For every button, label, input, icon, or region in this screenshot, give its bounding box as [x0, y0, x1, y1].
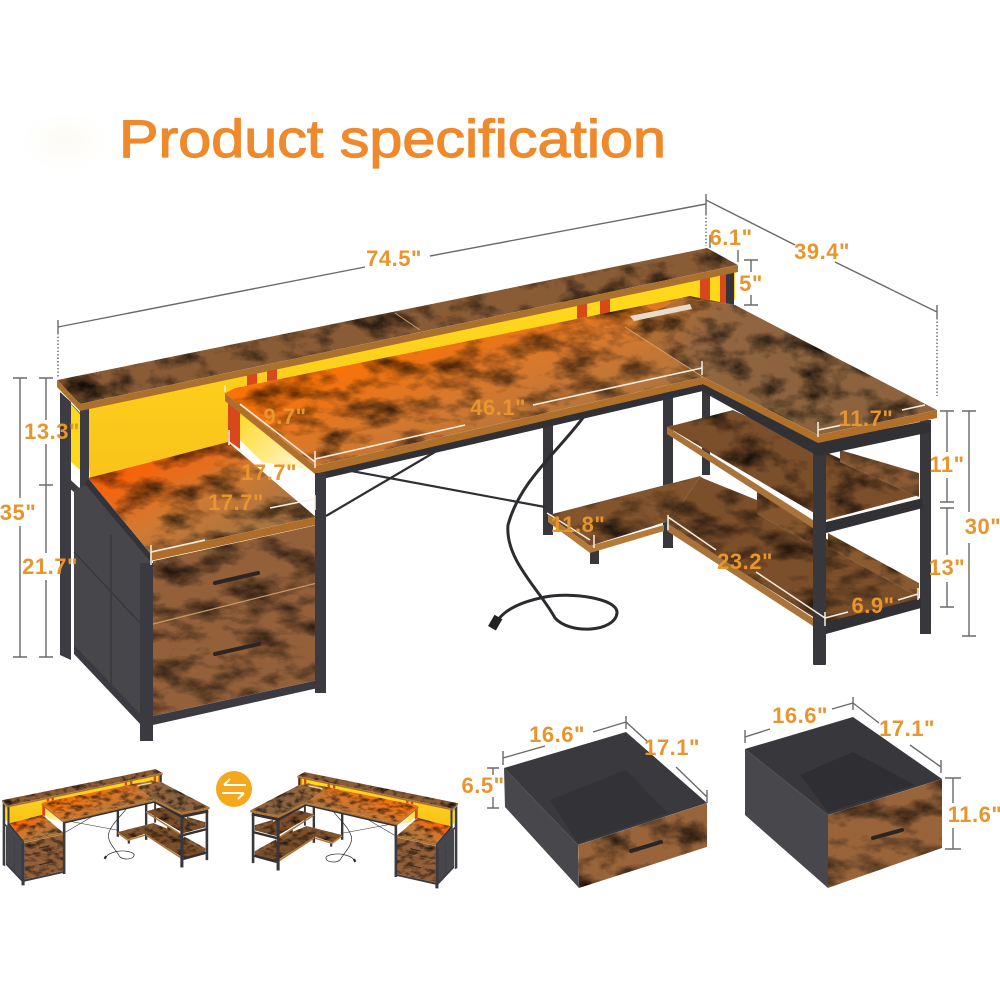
drawer interior [504, 732, 707, 845]
cabinet frame [74, 473, 326, 741]
deep drawer handle [873, 830, 902, 838]
dotted extension lines [58, 214, 937, 396]
cabinet front drawers [153, 525, 318, 716]
dimension labels [0, 225, 1000, 827]
dimension labels: 13" [929, 555, 965, 580]
right hutch post [726, 270, 734, 306]
desk and shelf-unit legs [543, 385, 931, 634]
dimension labels: 16.6" [772, 703, 828, 728]
drawer front [578, 803, 707, 888]
icon: reversible swap arrows [216, 771, 252, 807]
cross brace [326, 449, 545, 516]
hutch risers [228, 272, 726, 450]
deep drawer front [828, 779, 942, 888]
drawer: shallow [504, 732, 707, 888]
drawer floor [550, 770, 668, 843]
dimension labels: 5" [739, 271, 763, 296]
dimension labels: 17.7" [241, 460, 297, 485]
dimension labels: 21.7" [22, 554, 78, 579]
desk surface [225, 296, 937, 466]
cabinet top [85, 442, 316, 561]
deep drawer interior [745, 717, 942, 815]
power plug [488, 615, 502, 631]
glowing back panel [84, 270, 735, 480]
dimension labels: 11.8" [551, 512, 605, 537]
main desk illustration [57, 248, 937, 741]
dimension labels: 9.7" [263, 404, 307, 429]
deep drawer side [745, 749, 828, 888]
dimension labels: 11.7" [839, 406, 893, 431]
dimension labels: 17.7" [208, 490, 264, 515]
lower right shelf [667, 477, 921, 634]
small side shelf [548, 476, 735, 553]
deep drawer floor [800, 752, 915, 812]
dimension labels: 39.4" [794, 239, 850, 264]
upper right shelf [667, 410, 923, 533]
power cord [498, 415, 617, 629]
dimension labels: 35" [0, 500, 36, 525]
dimension labels: 11" [929, 452, 965, 477]
dimension labels: 74.5" [366, 246, 422, 271]
shelf unit front leg [813, 445, 826, 665]
dimension labels: 6.1" [709, 225, 753, 250]
dimension labels: 17.1" [644, 735, 700, 760]
desk front edge banding [225, 377, 937, 474]
hutch shelf [57, 248, 738, 411]
drawer handle [631, 842, 661, 851]
under-desk rails [318, 384, 931, 480]
dimension labels: 17.1" [879, 716, 935, 741]
white measurement lines on desk [151, 361, 925, 626]
left frame posts [60, 392, 90, 660]
yellow gap in left frame [71, 404, 80, 470]
drawer side [504, 768, 579, 888]
title glow [20, 112, 110, 172]
thumbnail: left-hand configuration [2, 769, 210, 885]
dimension lines: drawers [487, 697, 961, 849]
dimension lines: main desk [13, 194, 976, 657]
dimension labels: 6.5" [461, 773, 505, 798]
dimension labels: 23.2" [717, 549, 773, 574]
drawer: deep [745, 717, 942, 888]
dimension labels: 13.3" [24, 419, 80, 444]
title: Product specification [119, 110, 666, 169]
dimension labels: 16.6" [529, 722, 585, 747]
thumbnail: right-hand configuration [250, 772, 458, 888]
cabinet fabric side [74, 484, 152, 722]
dimension labels: 6.9" [851, 593, 895, 618]
dimension labels: 46.1" [470, 395, 526, 420]
